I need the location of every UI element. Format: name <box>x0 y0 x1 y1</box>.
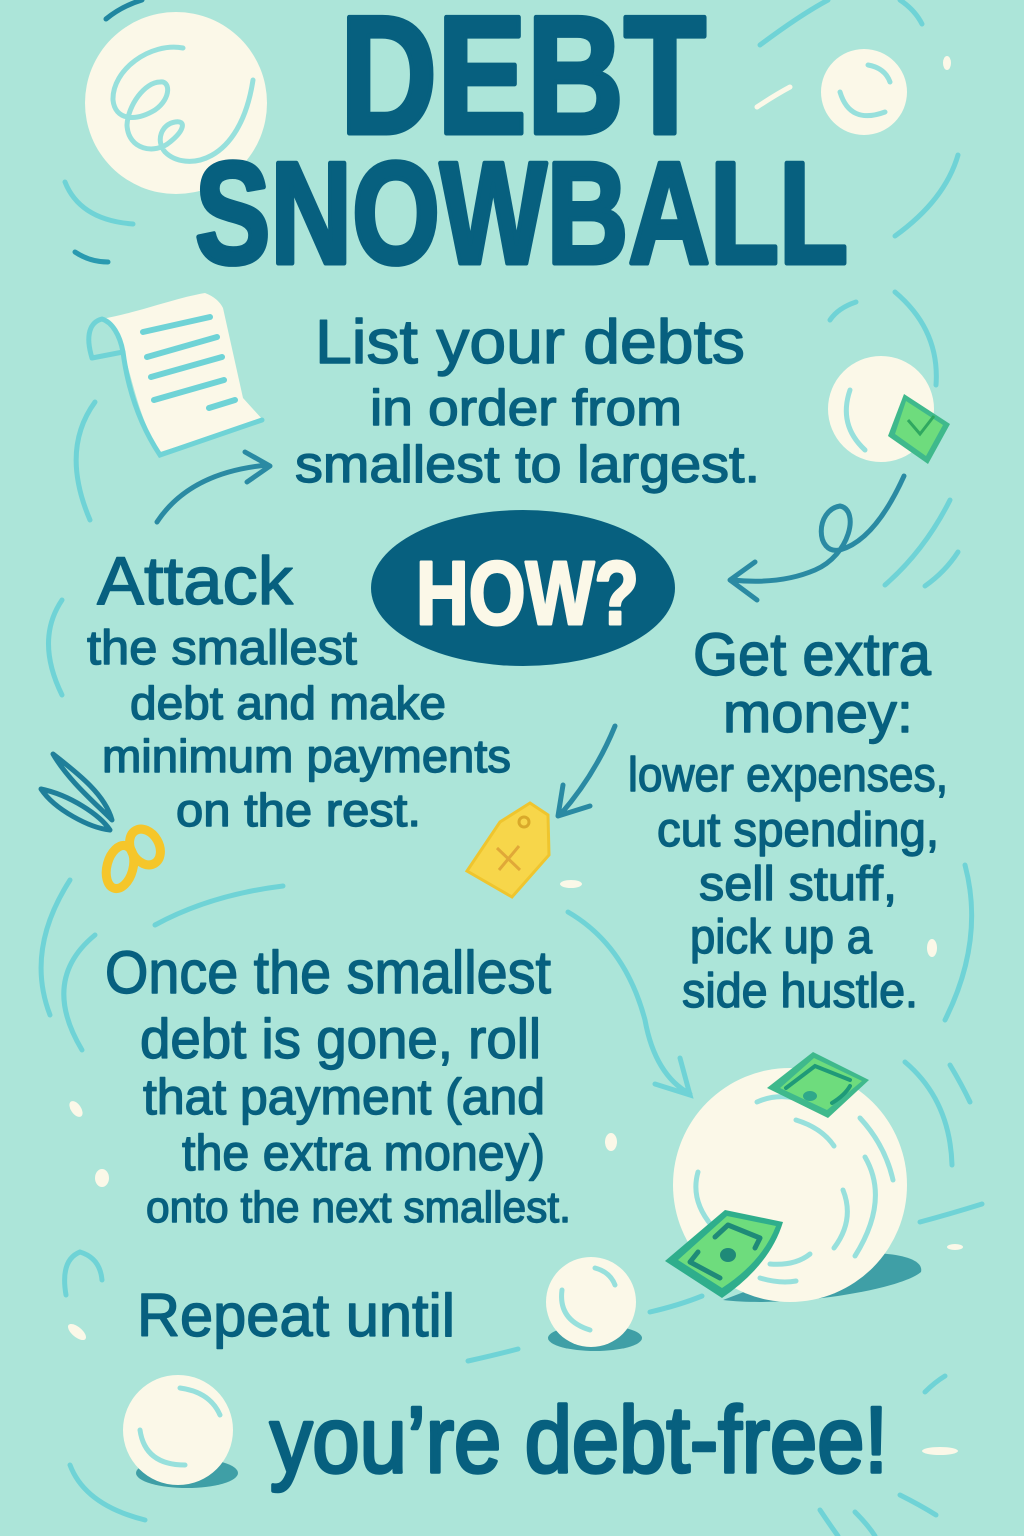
title: SNOWBALL <box>195 132 848 294</box>
text: get extra money: money: <box>723 681 913 744</box>
text: once the smallest: onto the next smallest. <box>146 1183 571 1232</box>
how badge: HOW? <box>416 544 639 644</box>
text: once the smallest: debt is gone, roll <box>140 1007 541 1070</box>
text: you're debt-free: you’re debt-free! <box>270 1387 888 1492</box>
text: attack the smallest: the smallest <box>87 622 357 675</box>
text: get extra money: pick up a <box>690 911 872 964</box>
arrow: curly to how <box>730 476 904 600</box>
text: once the smallest <box>105 939 571 1232</box>
text: get extra money: lower expenses, <box>628 749 948 802</box>
text: list your debts <box>295 308 760 494</box>
text: list your debts: in order from <box>370 380 682 436</box>
icon: small snowball top right <box>821 49 907 135</box>
text: get extra money: Get extra <box>693 621 932 688</box>
arrow: to big snowball <box>568 912 690 1095</box>
text: attack the smallest: debt and make <box>130 677 446 729</box>
text: get extra money: sell stuff, <box>699 858 897 911</box>
text: once the smallest: the extra money) <box>182 1125 545 1181</box>
text: get extra money: cut spending, <box>657 804 939 857</box>
icon: big snowball with cash <box>665 1052 921 1302</box>
text: once the smallest: Once the smallest <box>105 939 551 1006</box>
text: once the smallest: that payment (and <box>143 1069 545 1125</box>
icon: paper list <box>89 293 263 455</box>
text: repeat until: Repeat until <box>137 1282 455 1349</box>
arrow: paper to list text <box>157 452 270 522</box>
text: attack the smallest: on the rest. <box>176 784 421 836</box>
icon: scissors <box>41 754 167 892</box>
icon: large snowball top left <box>85 12 267 194</box>
text: list your debts: List your debts <box>315 308 745 377</box>
icon: snowball with cash <box>828 356 950 464</box>
text: get extra money: side hustle. <box>682 965 918 1018</box>
icon: small snowball center <box>546 1257 642 1351</box>
arrow: text to tag <box>558 726 615 816</box>
text: attack the smallest <box>87 543 511 836</box>
how badge <box>371 510 675 666</box>
icon: small snowball bottom left <box>123 1375 238 1488</box>
text: attack the smallest: Attack <box>97 543 294 619</box>
text: attack the smallest: minimum payments <box>102 730 511 782</box>
title <box>195 0 848 294</box>
text: get extra money <box>628 621 948 1018</box>
text: list your debts: smallest to largest. <box>295 436 760 494</box>
icon: yellow price tag <box>467 803 549 897</box>
